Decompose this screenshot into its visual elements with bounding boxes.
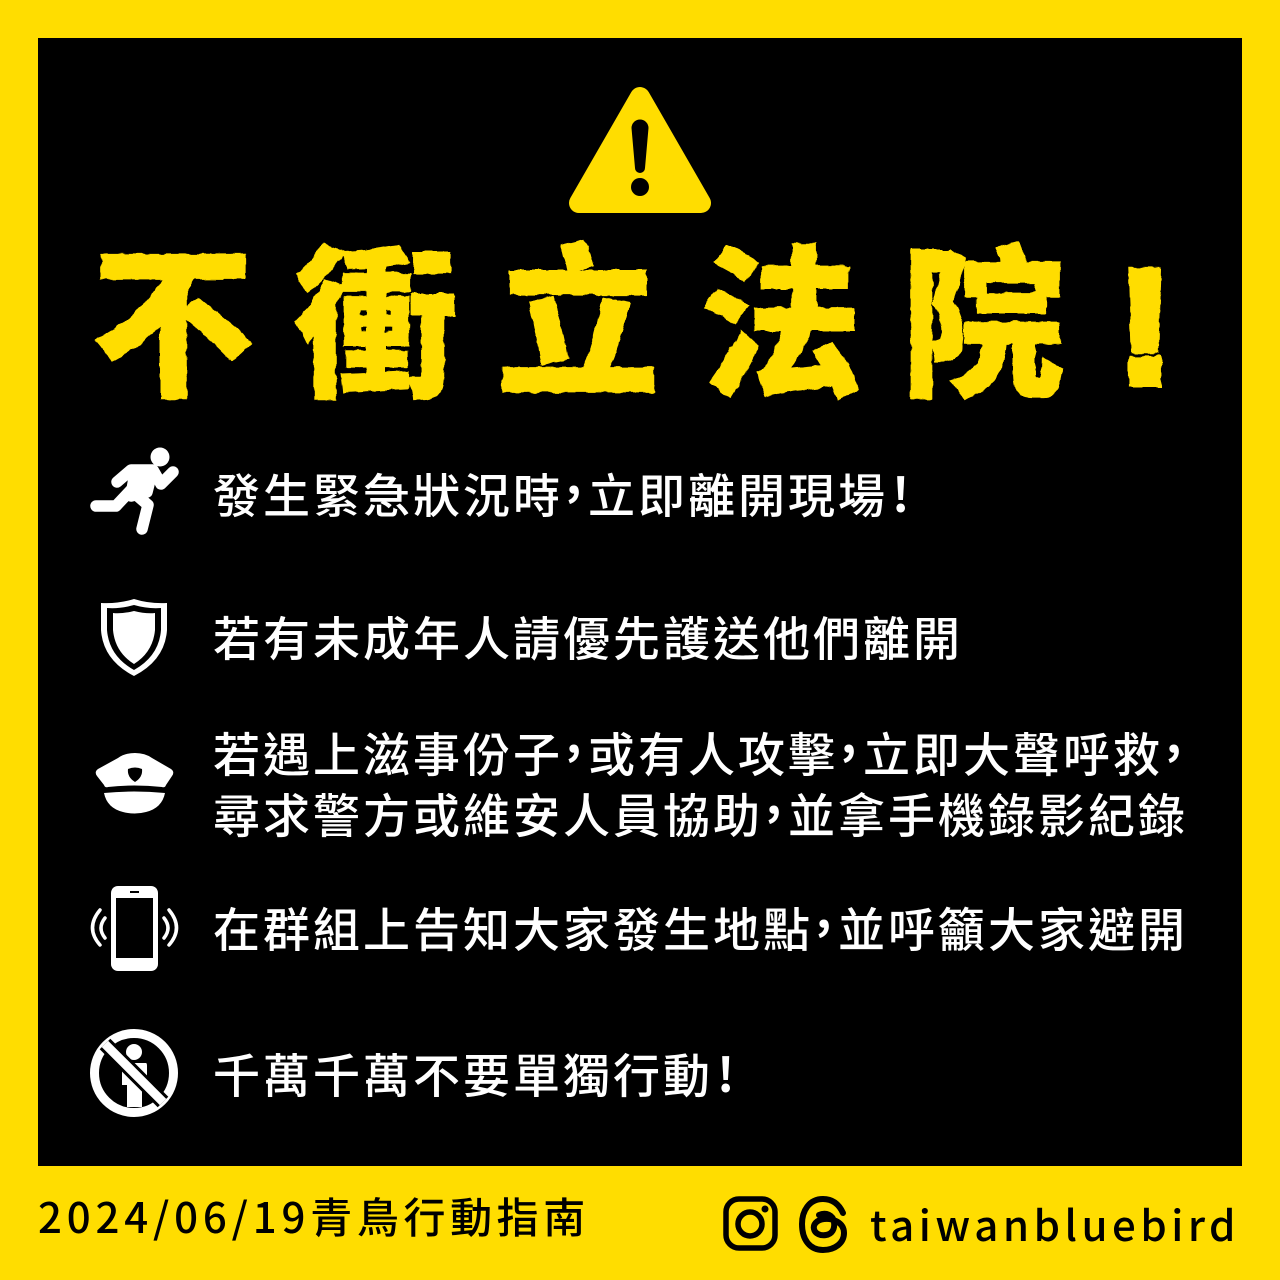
text: notify group: , <box>816 873 831 942</box>
icon: shield <box>101 599 167 676</box>
text: call for help line 1: , <box>1166 698 1181 767</box>
icon: police cap <box>96 753 173 814</box>
title: 衝 <box>294 195 458 432</box>
text: call for help line 1: , <box>566 698 581 767</box>
text: call for help line 2: , <box>766 759 781 828</box>
footer: social account: taiwanbluebird <box>870 1193 1240 1254</box>
title: 不 <box>91 195 255 432</box>
text: leave the scene: 發生緊急狀況時 立即離開現場 <box>213 458 888 527</box>
text: do not act alone: 千萬千萬不要單獨行動 <box>213 1038 713 1107</box>
title: 院 <box>901 195 1065 432</box>
icon: running person <box>96 448 173 529</box>
text: do not act alone: ! <box>717 1037 734 1106</box>
icon: no single person <box>94 1034 174 1112</box>
title: 法 <box>699 195 863 432</box>
text: call for help line 1: 若遇上滋事份子 或有人攻擊 立即大聲呼救 <box>213 717 1163 786</box>
icon: threads <box>802 1199 844 1250</box>
text: leave the scene: ! <box>892 457 909 526</box>
footer: date and guide title: 2024/06/19青鳥行動指南 <box>38 1185 590 1246</box>
text: call for help line 2: 尋求警方或維安人員協助 並拿手機錄影紀錄 <box>213 778 1188 847</box>
text: call for help line 1: , <box>841 698 856 767</box>
title: ! <box>1118 237 1172 416</box>
icon: warning triangle <box>579 97 701 203</box>
text: leave the scene: , <box>566 439 581 508</box>
text: protect minors: 若有未成年人請優先護送他們離開 <box>213 601 963 670</box>
text: notify group: 在群組上告知大家發生地點 並呼籲大家避開 <box>213 892 1188 961</box>
icon: vibrating phone <box>92 886 176 971</box>
title: 立 <box>496 193 660 430</box>
title <box>91 193 1172 432</box>
icon: instagram <box>726 1199 775 1248</box>
